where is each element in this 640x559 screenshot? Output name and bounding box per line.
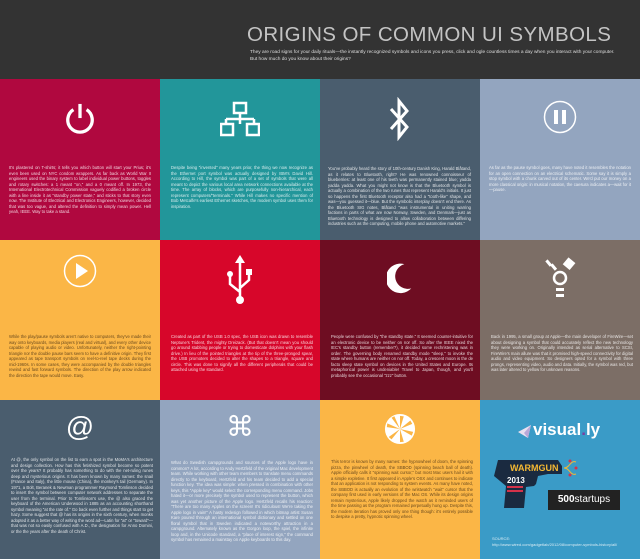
panel: sleep bbox=[320, 240, 480, 400]
title: ORIGINS OF COMMON UI SYMBOLS bbox=[247, 23, 611, 46]
icon: at: @ bbox=[66, 411, 94, 442]
text: firewire: Back in 1995, a small group at Apple—the main developer of FireWire—set about designing a symbol that could accurately reflect the new technology they were working on. Originally intended as serial alternative to SCSI, FireWire's main allure was that it promised high-speed connectivity for digital audio and video equipment. So designers opted for a symbol with three prongs, representing video, audio and data. Initially, the symbol was red, but was later altered to yellow for unknown reasons. bbox=[491, 334, 633, 372]
icon: pause bbox=[544, 100, 576, 134]
text: power: It's plastered on T-shirts; it tells you which button will start your Prius; it's even been used on NYC condom wrappers. As far back as World War II engineers used the binary system to label individual power buttons, toggles and rotary switches: a 1 meant "on," and a 0 meant off. In 1973, the International Electrotechnical Commission vaguely codified a broken circle with a line inside it as "standby power state," and sticks to that story even now. The Institute of Electrical and Electronics Engineers, however, decided that was too vague, and altered the definition to simply mean power. Hell yeah, IEEE. Way to take a stand. bbox=[9, 165, 151, 214]
text: at: At @, the only symbol on the list to earn a spot in the MoMA's architecture and design collection. How has this fetishized symbol become so potent over the years? It probably has something to do with the net-ruling runes deep and mysterious origins. It has been known by many names: the snail (France and Italy), the little mouse (China), the monkey's tail (Germany). In 1971, a Bolt, Beranek & Newman programmer Raymond Tomlinson decided to insert the symbol between computer network addresses to separate the user from the terminal. Prior to Tomlinson's use, the @ also graced the keyboard of the American Underwood in 1885 as an accounting shorthand symbol meaning "at the rate of." Go back even further and things start to get hazy. Some suggest that @ has its origins in the sixth century, when monks adopted it as a better way of writing the word ad—Latin for "at" or "toward"—that was not so easily confused with A.D., the designation for Anno Domini, or the the years after the death of Christ. bbox=[11, 457, 153, 534]
text: network: Despite being "invented" many years prior, the thing we now recognize as the Ethernet port symbol was actually designed by IBM's David Hill. According to Hill, the symbol was part of a set of symbols that were all meant to depict the various local area network connections available at the time. The array of blocks, which are purposefully non-hierarchical, each represent computers/"terminals." While Hill makes no specific mention of Bob Metcalfe's earliest Ethernet sketches, the modern symbol uses them for inspiration. bbox=[171, 165, 313, 208]
icon: firewire bbox=[545, 258, 576, 297]
text: bluetooth: You've probably heard the story of 10th-century Danish King, Harald Blåtand, as it relates to Bluetooth, right? He was renowned connoisseur of blueberries: at least one of his teeth was permanently stained blue; yadda yadda yadda. What you might not know is that the Bluetooth symbol is actually a combination of the two runes that represent Harald's initials. It just so happens the first Bluetooth receptor also had a "tooth-like" shape, and was—you guessed it—blue. But the symbolic interplay doesn't end there. As the Bluetooth SIG notes, Blåtand "was instrumental in uniting warring factions in parts of what are now Norway, Sweden, and Denmark—just as Bluetooth technology is designed to allow collaboration between differing industries such as the computing, mobile phone and automotive markets." bbox=[328, 166, 471, 226]
source: http://www.wired.com/gadgetlab/2012/08/computer-symbols-history/all/ bbox=[492, 542, 617, 547]
text: command: What do Swedish campgrounds and sources of the Apple logo have in common? A lot, according to Andy Hertzfeld of the original Mac development team. While working with other team members to translate menu commands directly to the keyboard, Hertzfeld and his team decided to add a special function key. The idea was simple: when pressed in combination with other keys, this "Apple key" would select the corresponding menu command. Jobs hated it—or more precisely the symbol used to represent the button, which was yet another picture of the Apple logo. Hertzfeld recalls his reaction: "There are too many Apples on the screen! It's ridiculous! We're taking the Apple logo in vain!" A hasty redesign followed in which bitmap artist Susan Kare poured through an international symbol dictionary and settled on one floral symbol that in Sweden indicated a noteworthy attraction in a campground. Alternately known as the Gorgon loop, the spiel, the infinite loop and, in the Unicode standard, a "place of interest sign," the command symbol has remained a mainstay on Apple keyboards to this day. bbox=[171, 460, 313, 542]
icon: spinning wheel bbox=[384, 414, 416, 444]
icon: power bbox=[66, 104, 94, 134]
text: play: While the play/pause symbols aren't native to computers, they've made their way onto keyboards, media players (real and virtual), and every other device capable of playing audio or video. Unfortunately, neither the right-pointing triangle nor the double pause bars seem to have a definitive origin. They first appeared as tape transport symbols on reel-to-reel tape decks during the mid-1960s. In some cases, they were accompanied by the double triangles rewind and fast forward symbols. The direction of the play arrow indicated the direction the tape would move. Easy. bbox=[9, 334, 151, 378]
panel: usb bbox=[160, 240, 320, 400]
source bbox=[492, 536, 618, 547]
panel: command bbox=[160, 400, 320, 559]
text: sleep: People were confused by "the standby state." It seemed counter-intuitive for an electronic device to be neither on nor off. So after the IEEE nixed the IEC's standby button (remember?), it decided some rechristening was in order. The governing body renamed standby mode "sleep," to invoke the state where humans are neither on nor off. Today, a crescent moon is the de facto sleep state symbol on devices in the United States and Europe. Its metaphorical power is undeniable! Travel to Japan, though, and you'll probably see the occasional "zzz" button. bbox=[331, 334, 473, 378]
panel: power bbox=[0, 79, 160, 240]
icon: command: ⌘ bbox=[226, 410, 254, 443]
panel: spinning wheel bbox=[320, 400, 480, 559]
logo: visual.ly: visual.ly bbox=[533, 420, 600, 439]
panel: at sign bbox=[0, 400, 160, 559]
panel: play bbox=[0, 240, 160, 400]
icon: bluetooth bbox=[390, 97, 409, 141]
text: pause: As far as the pause symbol goes, many have noted it resembles the notation for an open connection on an electrical schematic. Some say it is simply a stop symbol with a chunk carved out of its center. We'd put our money on a more classical origin: in musical notation, the caesura indicates a—wait for it—pause. bbox=[489, 165, 631, 192]
panel: credits bbox=[480, 400, 640, 559]
icon: network bbox=[220, 102, 260, 136]
source: SOURCE: bbox=[492, 536, 510, 541]
header bbox=[0, 0, 640, 79]
logo: warmgun gun: WARMGUN bbox=[510, 463, 558, 473]
logo: warmgun gun bbox=[494, 460, 578, 508]
text: usb: Created as part of the USB 1.0 spec, the USB icon was drawn to resemble Neptune's Trident, the mighty Dreizack. (But that doesn't mean you should go around stabbing people or trying to domesticate dolphins with your flash drive.) In lieu of the pointed triangles at the tip of the three-pronged spear, the USB promoters decided to alter the shapes to a triangle, square and circle. This was done to signify all the different peripherals that could be attached using the standard. bbox=[171, 334, 313, 372]
icon: play bbox=[64, 254, 96, 288]
subtitle: They are road signs for your daily rituals—the instantly recognized symbols and icons you press, click and ogle countless times a day when you interact with your computer. But how much do you know about their origins? bbox=[250, 50, 614, 62]
icon: moon bbox=[387, 264, 412, 294]
icon: usb bbox=[227, 255, 252, 304]
logo: warmgun gun: 2013 bbox=[507, 476, 525, 485]
panel: pause bbox=[480, 79, 640, 240]
panel: firewire bbox=[480, 240, 640, 400]
logo: 500 startups bbox=[548, 490, 620, 510]
panel: bluetooth bbox=[320, 79, 480, 240]
logo: 500 startups: 500startups bbox=[558, 494, 610, 505]
text: spinning wheel: This terror is known by many names: the hypnowheel of doom, the spinning pizza, the pinwheel of death, the SBBOD (spinning beach ball of death). Apple officially calls it "spinning wait cursor," but most Mac users hail it with a simple expletive. It first appeared in Apple's OSX and continues to indicate that an application is not responding to system events. As many have noted, the SBBOD is actually an evolution of the wristwatch "wait" cursor that the company first used in early versions of the Mac OS. While its design origins remain mysterious, Apple likely dropped the watch as it reminded users of the time passing as the program remained perpetually hung up. Despite this, the modern iteration has proved only one thing though: it's entirely possible to despise a pretty, hypnotic spinning wheel. bbox=[331, 459, 473, 519]
panel: network bbox=[160, 79, 320, 240]
